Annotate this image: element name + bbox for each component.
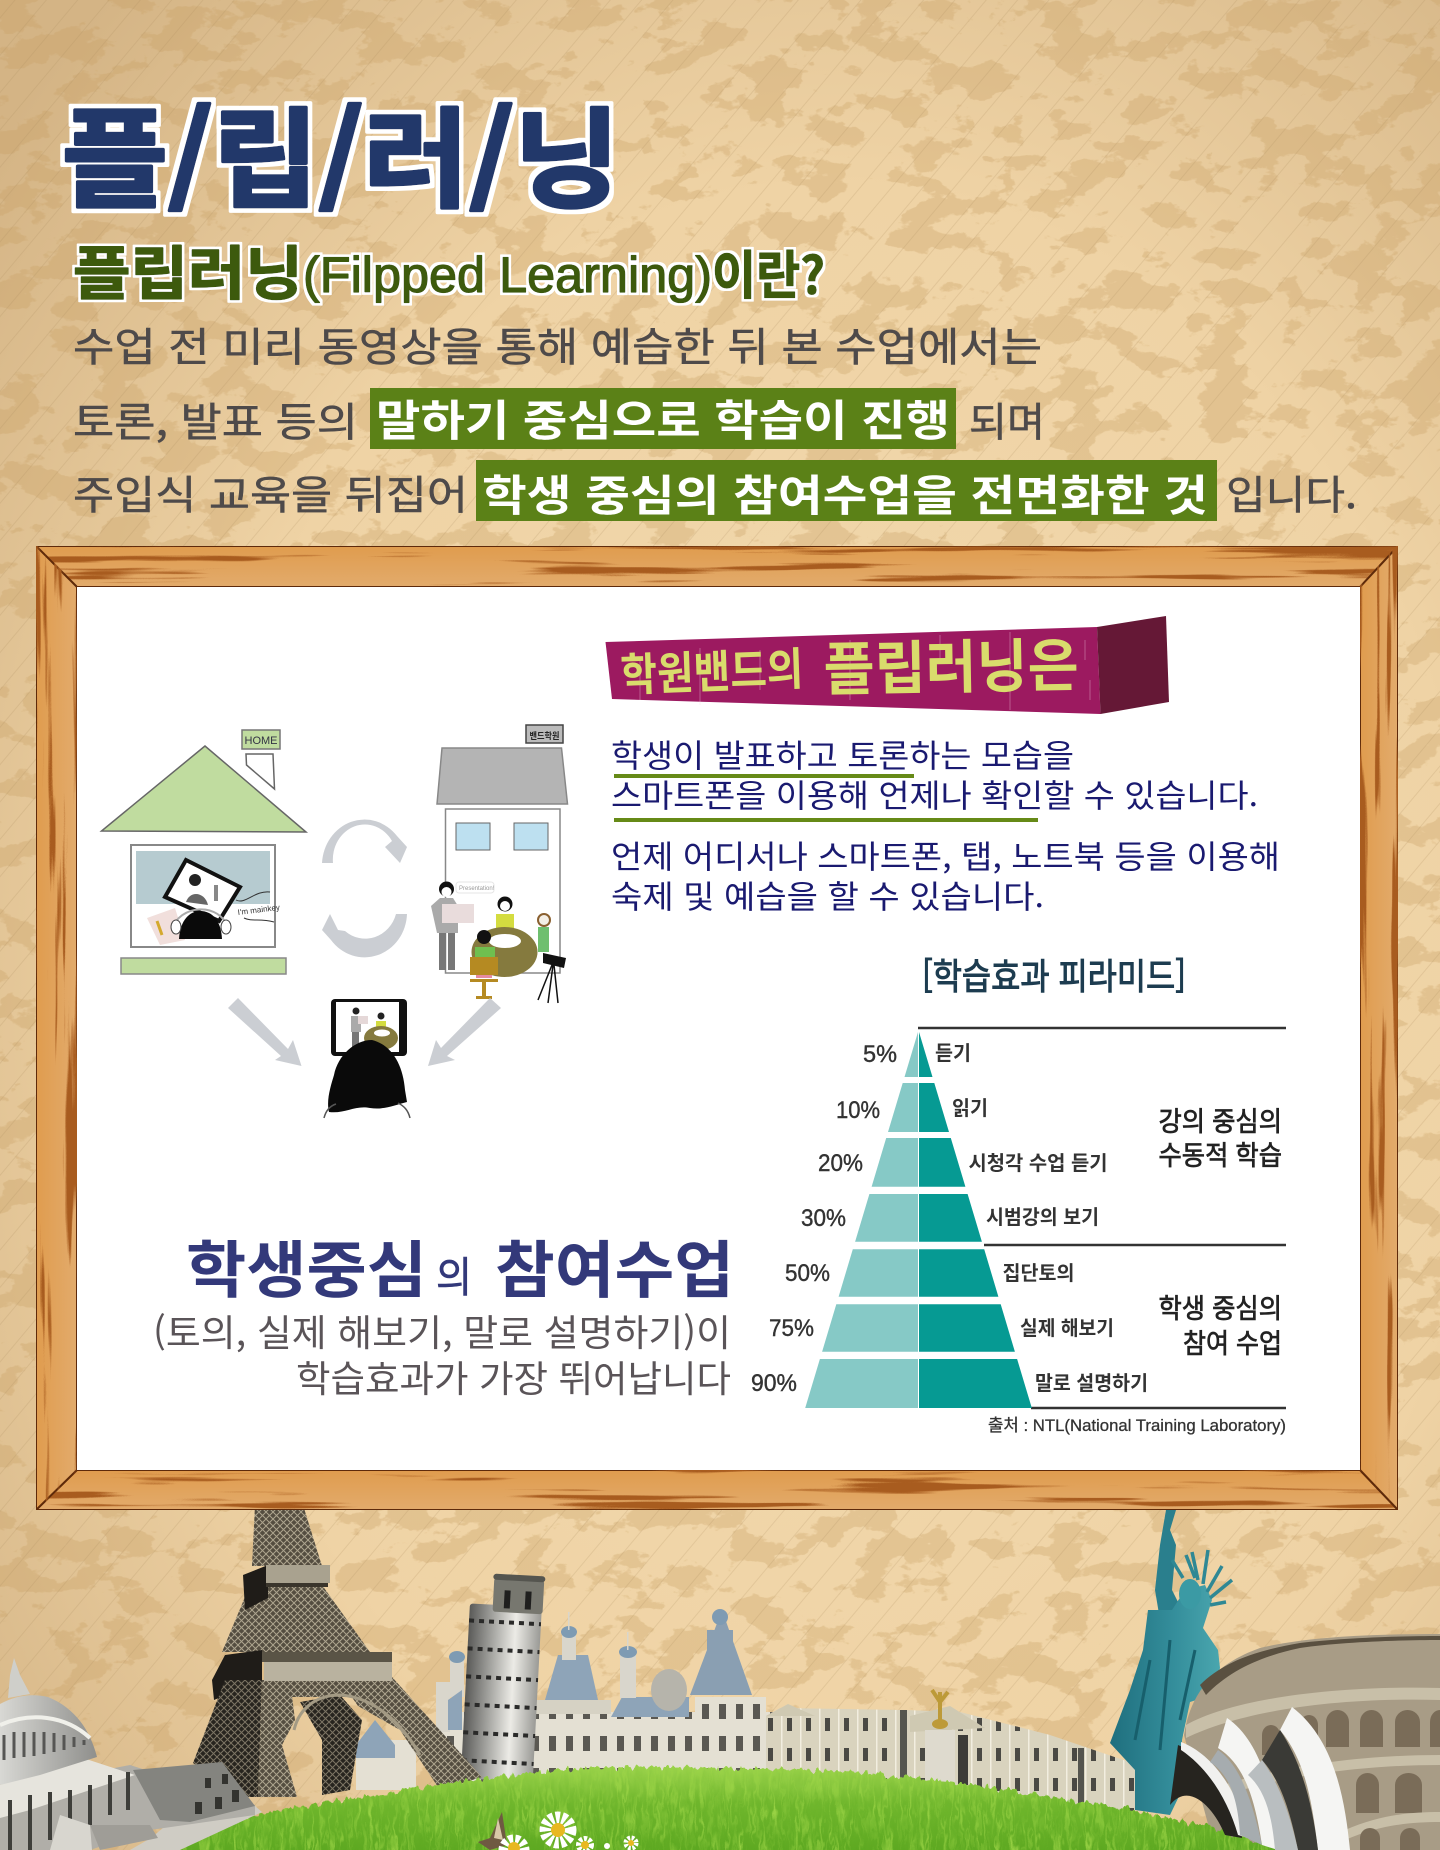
benefits text: 학생이 발표하고 토론하는 모습을 <box>611 731 1074 777</box>
title: 플/립/러/닝 <box>62 74 620 230</box>
diagram: academy building with students: 밴드학원 <box>530 729 560 742</box>
callout: student-centred participation: (토의, 실제 해보기, 말로 설명하기)이 <box>153 1303 731 1357</box>
whiteboard panel <box>77 587 1360 1470</box>
benefits text: 숙제 및 예습을 할 수 있습니다. <box>611 872 1044 918</box>
landmark: Sydney Opera House <box>1170 1707 1350 1850</box>
icon: rotation arrows <box>322 820 407 957</box>
chart: learning pyramid: 50% <box>785 1260 830 1287</box>
benefits text: 언제 어디서나 스마트폰, 탭, 노트북 등을 이용해 <box>611 832 1280 878</box>
chart: learning pyramid: 시청각 수업 듣기 <box>968 1147 1108 1176</box>
wooden frame <box>36 546 1398 1510</box>
diagram: home: I'm mainkey <box>237 903 280 917</box>
chart: learning pyramid: 10% <box>836 1097 880 1124</box>
subtitle: 플립러닝 <box>73 227 303 311</box>
chart: learning pyramid: 말로 설명하기 <box>1035 1367 1148 1396</box>
chart: learning pyramid: 75% <box>769 1315 814 1342</box>
intro text <box>73 315 1357 524</box>
chart: learning pyramid: 30% <box>801 1205 846 1232</box>
chart: learning pyramid: [학습효과 피라미드] <box>922 948 1186 1000</box>
chart: learning pyramid: 20% <box>818 1150 863 1177</box>
intro text: 토론, 발표 등의 <box>73 390 358 448</box>
grass hill <box>118 1767 1312 1850</box>
chart: learning pyramid: 학생 중심의 <box>1158 1287 1282 1326</box>
banner: 플립러닝은 <box>823 619 1079 707</box>
chart: learning pyramid: 시범강의 보기 <box>986 1201 1099 1230</box>
chart: learning pyramid: 집단토의 <box>1002 1257 1074 1286</box>
chart: learning pyramid: 5% <box>863 1041 897 1068</box>
intro text: 주입식 교육을 뒤집어 <box>73 463 468 521</box>
intro text: 입니다. <box>1226 463 1357 521</box>
diagram: academy building with students: Presentation! <box>459 886 495 892</box>
callout: student-centred participation: 학습효과가 가장 뛰어납니다 <box>296 1349 731 1403</box>
landmark: Statue of Liberty <box>1110 1510 1232 1815</box>
subtitle: (Filpped Learning) <box>303 247 712 303</box>
icon: arrow from home <box>228 998 302 1066</box>
diagram: home <box>102 730 306 974</box>
subtitle <box>73 227 825 311</box>
chart: learning pyramid: 수동적 학습 <box>1158 1134 1282 1173</box>
intro text: 되며 <box>969 390 1045 448</box>
landmark: palace <box>766 1690 1138 1815</box>
chart: learning pyramid: 듣기 <box>935 1037 971 1066</box>
diagram: academy building with students <box>431 725 568 1003</box>
diagram: student viewing tablet <box>324 999 410 1118</box>
chart: learning pyramid: 90% <box>751 1370 797 1397</box>
subtitle: 이란? <box>712 234 825 309</box>
banner <box>606 616 1169 714</box>
landmark: Leaning Tower of Pisa <box>461 1572 545 1782</box>
landmark: Colosseum <box>1184 1634 1440 1850</box>
chart: learning pyramid: 강의 중심의 <box>1158 1100 1282 1139</box>
landmark: Eiffel Tower <box>193 1505 482 1797</box>
intro text: 수업 전 미리 동영상을 통해 예습한 뒤 본 수업에서는 <box>73 315 1042 373</box>
chart: learning pyramid: 출처 : NTL(National Training Laboratory) <box>988 1416 1286 1435</box>
chart: learning pyramid: 실제 해보기 <box>1020 1312 1114 1341</box>
intro text: 학생 중심의 참여수업을 전면화한 것 <box>482 462 1208 524</box>
banner: 학원밴드의 <box>619 633 804 704</box>
daisies and butterfly <box>478 1812 636 1850</box>
callout: student-centred participation: 학생중심 <box>186 1220 427 1310</box>
callout: student-centred participation: 의 <box>436 1244 472 1305</box>
diagram: home: HOME <box>244 735 278 747</box>
chart: learning pyramid: 참여 수업 <box>1183 1322 1282 1361</box>
benefits text: 스마트폰을 이용해 언제나 확인할 수 있습니다. <box>611 771 1258 817</box>
callout: student-centred participation <box>153 1220 734 1403</box>
icon: arrow from academy <box>428 998 501 1066</box>
chart: learning pyramid <box>751 948 1286 1435</box>
callout: student-centred participation: 참여수업 <box>495 1220 734 1310</box>
benefits text <box>611 731 1280 918</box>
landmark: US Capitol <box>0 1658 262 1850</box>
landmark: chateau <box>356 1609 776 1790</box>
chart: learning pyramid: 읽기 <box>952 1092 988 1121</box>
intro text: 말하기 중심으로 학습이 진행 <box>376 387 950 449</box>
